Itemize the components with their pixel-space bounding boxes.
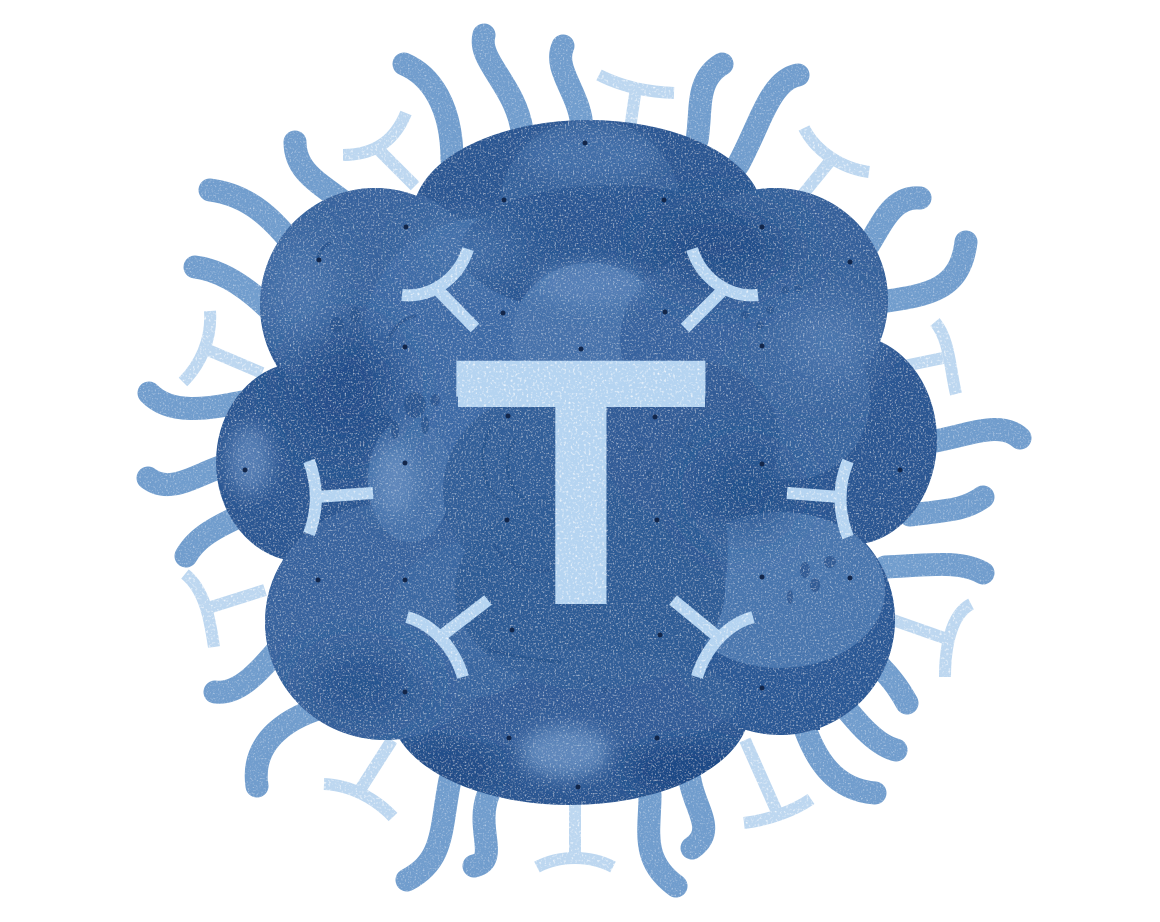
surface pores xyxy=(242,140,902,790)
mottling xyxy=(290,325,400,445)
tentacles xyxy=(148,35,1020,886)
mid lobes xyxy=(388,218,520,456)
cell body xyxy=(200,110,960,820)
illustration: T cell xyxy=(136,24,1032,898)
cell details xyxy=(317,243,560,785)
letter T: T xyxy=(453,292,709,671)
outer antibodies xyxy=(183,75,971,867)
inner antibodies xyxy=(309,249,848,677)
base colour xyxy=(200,110,960,820)
organelle spots xyxy=(330,284,836,693)
outer lobes xyxy=(500,120,678,206)
